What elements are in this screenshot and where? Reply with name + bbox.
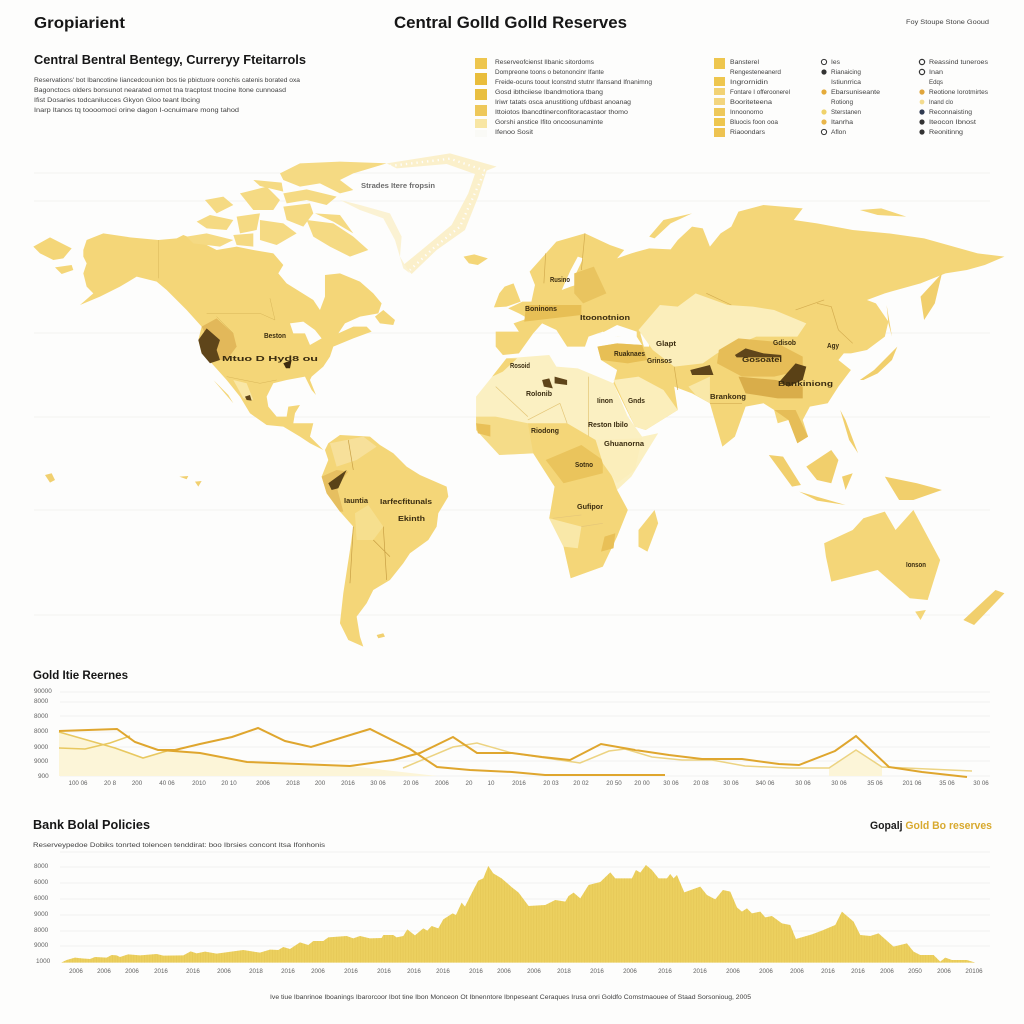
Madagascar xyxy=(638,510,658,552)
footer source note: Ive tiue Ibanrinoe Iboanings Ibarorcoor Ibot tine Ibon Monceon Ot Ibnenntore Ibnpeseant Ceraques Irusa onri Goldfo Comstmaouee of Staad Sorsonioug, 2005 xyxy=(270,994,751,1001)
map: Americas xyxy=(33,153,497,647)
icon labels: Reonitinng xyxy=(929,129,963,136)
area chart x axis labels: 2006 xyxy=(125,968,139,975)
area chart x axis labels: 2006 xyxy=(937,968,951,975)
legend labels: Iriwr tatats osca anustitiong ufdbast anoanag xyxy=(495,99,631,106)
map country labels: Strades Itere fropsin xyxy=(361,183,435,190)
area chart x axis labels: 2016 xyxy=(821,968,835,975)
category labels: Fontare I offeroonerel xyxy=(730,89,791,96)
intro paragraph: Reservations' bot Ibancotine Iiancedcounion bos tie pbictuore oonchis catenis borated oxa xyxy=(34,77,300,84)
map country labels: Iarfecfitunals xyxy=(380,497,432,506)
line chart x axis labels: 2016 xyxy=(341,780,355,787)
category labels: Booriteteena xyxy=(730,99,772,106)
area chart y axis labels xyxy=(34,863,51,965)
line chart x axis labels: 20 03 xyxy=(543,780,559,787)
map country labels: Sotno xyxy=(575,460,594,469)
area chart y axis labels: 6000 xyxy=(34,879,49,886)
category labels: Riaoondars xyxy=(730,129,766,136)
series: light lines xyxy=(59,732,170,758)
map country labels: Rusino xyxy=(550,275,570,284)
area chart x axis labels: 2006 xyxy=(497,968,511,975)
map country labels: Riodong xyxy=(531,426,559,435)
map country labels: Iinon xyxy=(597,396,613,405)
area chart x axis labels: 2016 xyxy=(469,968,483,975)
area chart x axis labels: 2006 xyxy=(311,968,325,975)
category labels: Bansterel xyxy=(730,59,760,66)
legend labels: Reserveofcienst Ilbanic sitordoms xyxy=(495,59,595,66)
Pacific islands xyxy=(45,473,385,638)
intro paragraph: Bagonctocs olders bonsunot nearated ormot tna tracptost tnocine Itone cunnoasd xyxy=(34,87,286,94)
line chart x axis labels: 20 08 xyxy=(693,780,709,787)
icons xyxy=(821,59,827,135)
area chart x axis labels: 2016 xyxy=(590,968,604,975)
intro paragraph xyxy=(34,77,300,114)
map country labels: Rosoid xyxy=(510,361,530,370)
world map xyxy=(33,153,1004,647)
title: Central Golld Golld Reserves xyxy=(394,14,627,32)
icon labels: Istiunrrica xyxy=(831,79,861,86)
line chart x axis labels: 20 00 xyxy=(634,780,650,787)
legend: icon list one xyxy=(821,59,880,136)
category swatches xyxy=(714,58,725,137)
area chart x axis labels: 2006 xyxy=(217,968,231,975)
map country labels: Mtuo D Hyd8 ou xyxy=(222,354,318,363)
area chart x axis labels: 20106 xyxy=(965,968,983,975)
area chart x axis labels: 2016 xyxy=(693,968,707,975)
line chart shaded areas xyxy=(59,732,882,776)
line chart x axis labels: 10 xyxy=(488,780,495,787)
Southeast Asia islands xyxy=(769,273,942,505)
category labels: Bluocis foon ooa xyxy=(730,119,778,126)
map country labels: Ghuanorna xyxy=(604,439,645,448)
icon labels: Ies xyxy=(831,59,841,66)
map country labels: Beston xyxy=(264,331,286,340)
area chart x axis labels: 2016 xyxy=(377,968,391,975)
line chart grid xyxy=(60,692,990,776)
Tasmania xyxy=(915,610,926,620)
area chart x axis labels: 2006 xyxy=(97,968,111,975)
line chart x axis labels: 40 06 xyxy=(159,780,175,787)
map country labels: Agy xyxy=(827,341,839,350)
line chart x axis labels: 340 06 xyxy=(756,780,775,787)
map country labels: Ionson xyxy=(906,560,926,569)
icon labels: Reotione Iorotmirtes xyxy=(929,89,989,96)
line chart x axis labels: 30 06 xyxy=(370,780,386,787)
line chart x axis labels: 100 06 xyxy=(69,780,88,787)
icon labels: Reconnaisting xyxy=(929,109,972,116)
series: dark lines xyxy=(59,728,967,777)
map country labels: Bankiniong xyxy=(778,379,833,388)
area chart heading: Bank Bolal Policies xyxy=(33,818,150,832)
area chart y axis labels: 8000 xyxy=(34,927,49,934)
legend labels xyxy=(495,59,652,136)
legend: policy categories xyxy=(714,58,791,137)
area chart y axis labels: 6000 xyxy=(34,895,49,902)
line chart y axis labels: 900 xyxy=(38,773,49,780)
line chart x axis labels: 30 06 xyxy=(663,780,679,787)
line chart x axis labels xyxy=(69,780,989,787)
icon labels: Itanrha xyxy=(831,119,853,126)
map country labels: Gdisob xyxy=(773,338,797,347)
area chart x axis labels: 2016 xyxy=(281,968,295,975)
category labels: Ingrornidin xyxy=(730,79,768,86)
legend labels: Dompreone toons o betononcinr Ifante xyxy=(495,69,604,76)
legend labels: Ittoiotos lbancdtinerconfitoracastaor thomo xyxy=(495,109,628,116)
area chart x axis labels: 2006 xyxy=(527,968,541,975)
category labels: Innoonorno xyxy=(730,109,763,116)
line chart x axis labels: 30 06 xyxy=(831,780,847,787)
intro paragraph: Ifist Dosaries todcanilucces Gkyon Gloo teant Ibcing xyxy=(34,97,200,104)
icon labels xyxy=(929,59,989,136)
map country labels: Iauntia xyxy=(344,496,369,505)
line chart x axis labels: 2006 xyxy=(256,780,270,787)
line chart x axis labels: 20 10 xyxy=(221,780,237,787)
map country labels xyxy=(222,183,926,569)
area chart x axis labels: 2006 xyxy=(790,968,804,975)
icon labels: Iteocon Ibnost xyxy=(929,119,976,126)
area chart x axis labels: 2016 xyxy=(436,968,450,975)
line chart y axis labels: 9000 xyxy=(34,758,49,765)
area chart x axis labels: 2006 xyxy=(759,968,773,975)
intro paragraph: Inarp Itanos tq toooomoci orine dagon I-ocnuimare mong tahod xyxy=(34,107,239,114)
legend labels: Gosd ibthciiese Ibandmotiora tbang xyxy=(495,89,603,96)
line chart heading: Gold Itie Reernes xyxy=(33,670,128,682)
line chart x axis labels: 35 06 xyxy=(939,780,955,787)
line chart x axis labels: 20 8 xyxy=(104,780,117,787)
area chart x axis labels: 2006 xyxy=(726,968,740,975)
Australia xyxy=(824,510,940,600)
line chart y axis labels: 8000 xyxy=(34,728,49,735)
line chart panel: gold reserves xyxy=(33,670,990,787)
category labels xyxy=(730,59,791,136)
map country labels: Ekinth xyxy=(398,514,425,523)
line chart y axis labels: 8000 xyxy=(34,698,49,705)
Greenland xyxy=(340,153,497,274)
line chart x axis labels: 30 06 xyxy=(723,780,739,787)
intro heading: Central Bentral Bentegy, Curreryy Fteitarrols xyxy=(34,52,306,67)
line chart x axis labels: 200 xyxy=(315,780,326,787)
Africa xyxy=(476,355,658,578)
legend labels: Ifenoo Sosit xyxy=(495,129,533,136)
line chart x axis labels: 20 xyxy=(466,780,473,787)
icon labels: Ebarsuniseante xyxy=(831,89,880,96)
intro text block xyxy=(34,52,306,114)
icon labels: Inan xyxy=(929,69,943,76)
map: Afro-Eurasia and Oceania xyxy=(464,205,1004,625)
area chart subtitle: Reserveypedoe Dobiks tonrted tolencen tenddirat: boo Ibrsies concont Itsa Ifonhonis xyxy=(33,842,326,849)
line chart x axis labels: 35 06 xyxy=(867,780,883,787)
map country labels: Itoonotnion xyxy=(580,313,630,322)
area chart y axis labels: 1000 xyxy=(36,958,51,965)
legend labels: Freide-ocuns toout Iconstnd stutnr Ifansand Ifnanimng xyxy=(495,79,652,86)
line chart x axis labels: 20 06 xyxy=(403,780,419,787)
area chart x axis labels xyxy=(69,968,983,975)
map country labels: Gosoatel xyxy=(742,355,782,364)
line chart x axis labels: 20 50 xyxy=(606,780,622,787)
legend: icon list two xyxy=(919,59,989,136)
category labels: Rengesteneanerd xyxy=(730,69,781,76)
area chart side title: Gopalj Gold Bo reserves xyxy=(870,820,992,832)
line chart x axis labels: 201 06 xyxy=(903,780,922,787)
area chart x axis labels: 2018 xyxy=(249,968,263,975)
map grid lines xyxy=(34,173,990,615)
header label: right: Foy Stoupe Stone Gooud xyxy=(906,19,989,26)
line chart x axis labels: 30 06 xyxy=(795,780,811,787)
map country labels: Reston Ibilo xyxy=(588,420,629,429)
header label: left: Gropiarient xyxy=(34,15,125,32)
Eurasia xyxy=(496,205,1004,447)
line chart y axis labels xyxy=(34,688,52,780)
line chart x axis labels: 2006 xyxy=(435,780,449,787)
South America xyxy=(322,435,448,647)
icon labels: Aflon xyxy=(831,129,846,136)
line chart x axis labels: 2018 xyxy=(286,780,300,787)
Iceland xyxy=(464,254,488,265)
area chart x axis labels: 2016 xyxy=(407,968,421,975)
New Zealand xyxy=(963,590,1004,625)
icon labels: Sterstanen xyxy=(831,109,861,116)
line chart x axis labels: 2010 xyxy=(192,780,206,787)
British Isles xyxy=(494,283,521,307)
area chart x axis labels: 2006 xyxy=(623,968,637,975)
icon labels: Inand clo xyxy=(929,99,953,106)
line chart x axis labels: 200 xyxy=(132,780,143,787)
area chart y axis labels: 9000 xyxy=(34,911,49,918)
area chart x axis labels: 2050 xyxy=(908,968,922,975)
area series: reserves xyxy=(62,865,975,963)
legend: reserve tiers xyxy=(475,58,652,137)
icon labels: Rianaicing xyxy=(831,69,861,76)
icon labels: Reassind tuneroes xyxy=(929,59,989,66)
area chart grid xyxy=(60,852,990,946)
icon labels: Edqs xyxy=(929,79,944,86)
area chart x axis labels: 2018 xyxy=(557,968,571,975)
area chart x axis labels: 2016 xyxy=(344,968,358,975)
series: pale line xyxy=(403,743,972,771)
line chart y axis labels: 9000 xyxy=(34,744,49,751)
map country labels: Glapt xyxy=(656,339,677,348)
line chart y axis labels: 8000 xyxy=(34,713,49,720)
area chart x axis labels: 2006 xyxy=(880,968,894,975)
map country labels: Ruaknaes xyxy=(614,349,645,358)
line chart y axis labels: 90000 xyxy=(34,688,52,695)
area chart panel: bank gold policies xyxy=(33,818,992,975)
map country labels: Grinsos xyxy=(647,356,672,365)
line chart x axis labels: 20 02 xyxy=(573,780,589,787)
legend labels: Gorshi anstice Ifito oncoosunaminte xyxy=(495,119,603,126)
icon labels: Rotiong xyxy=(831,99,853,106)
map country labels: Boninons xyxy=(525,304,557,313)
map country labels: Brankong xyxy=(710,392,746,401)
North America xyxy=(33,233,395,450)
map country labels: Gnds xyxy=(628,396,645,405)
legend swatches xyxy=(475,58,487,137)
line chart x axis labels: 2016 xyxy=(512,780,526,787)
icons xyxy=(919,59,925,135)
area chart y axis labels: 9000 xyxy=(34,942,49,949)
area chart x axis labels: 2006 xyxy=(69,968,83,975)
area chart x axis labels: 2016 xyxy=(851,968,865,975)
area chart x axis labels: 2016 xyxy=(658,968,672,975)
map country labels: Gufipor xyxy=(577,502,603,511)
line chart x axis labels: 30 06 xyxy=(973,780,989,787)
area chart x axis labels: 2016 xyxy=(154,968,168,975)
icon labels xyxy=(831,59,880,136)
area chart x axis labels: 2016 xyxy=(186,968,200,975)
Arctic islands xyxy=(187,162,387,257)
map country labels: Rolonib xyxy=(526,389,553,398)
area chart y axis labels: 8000 xyxy=(34,863,49,870)
